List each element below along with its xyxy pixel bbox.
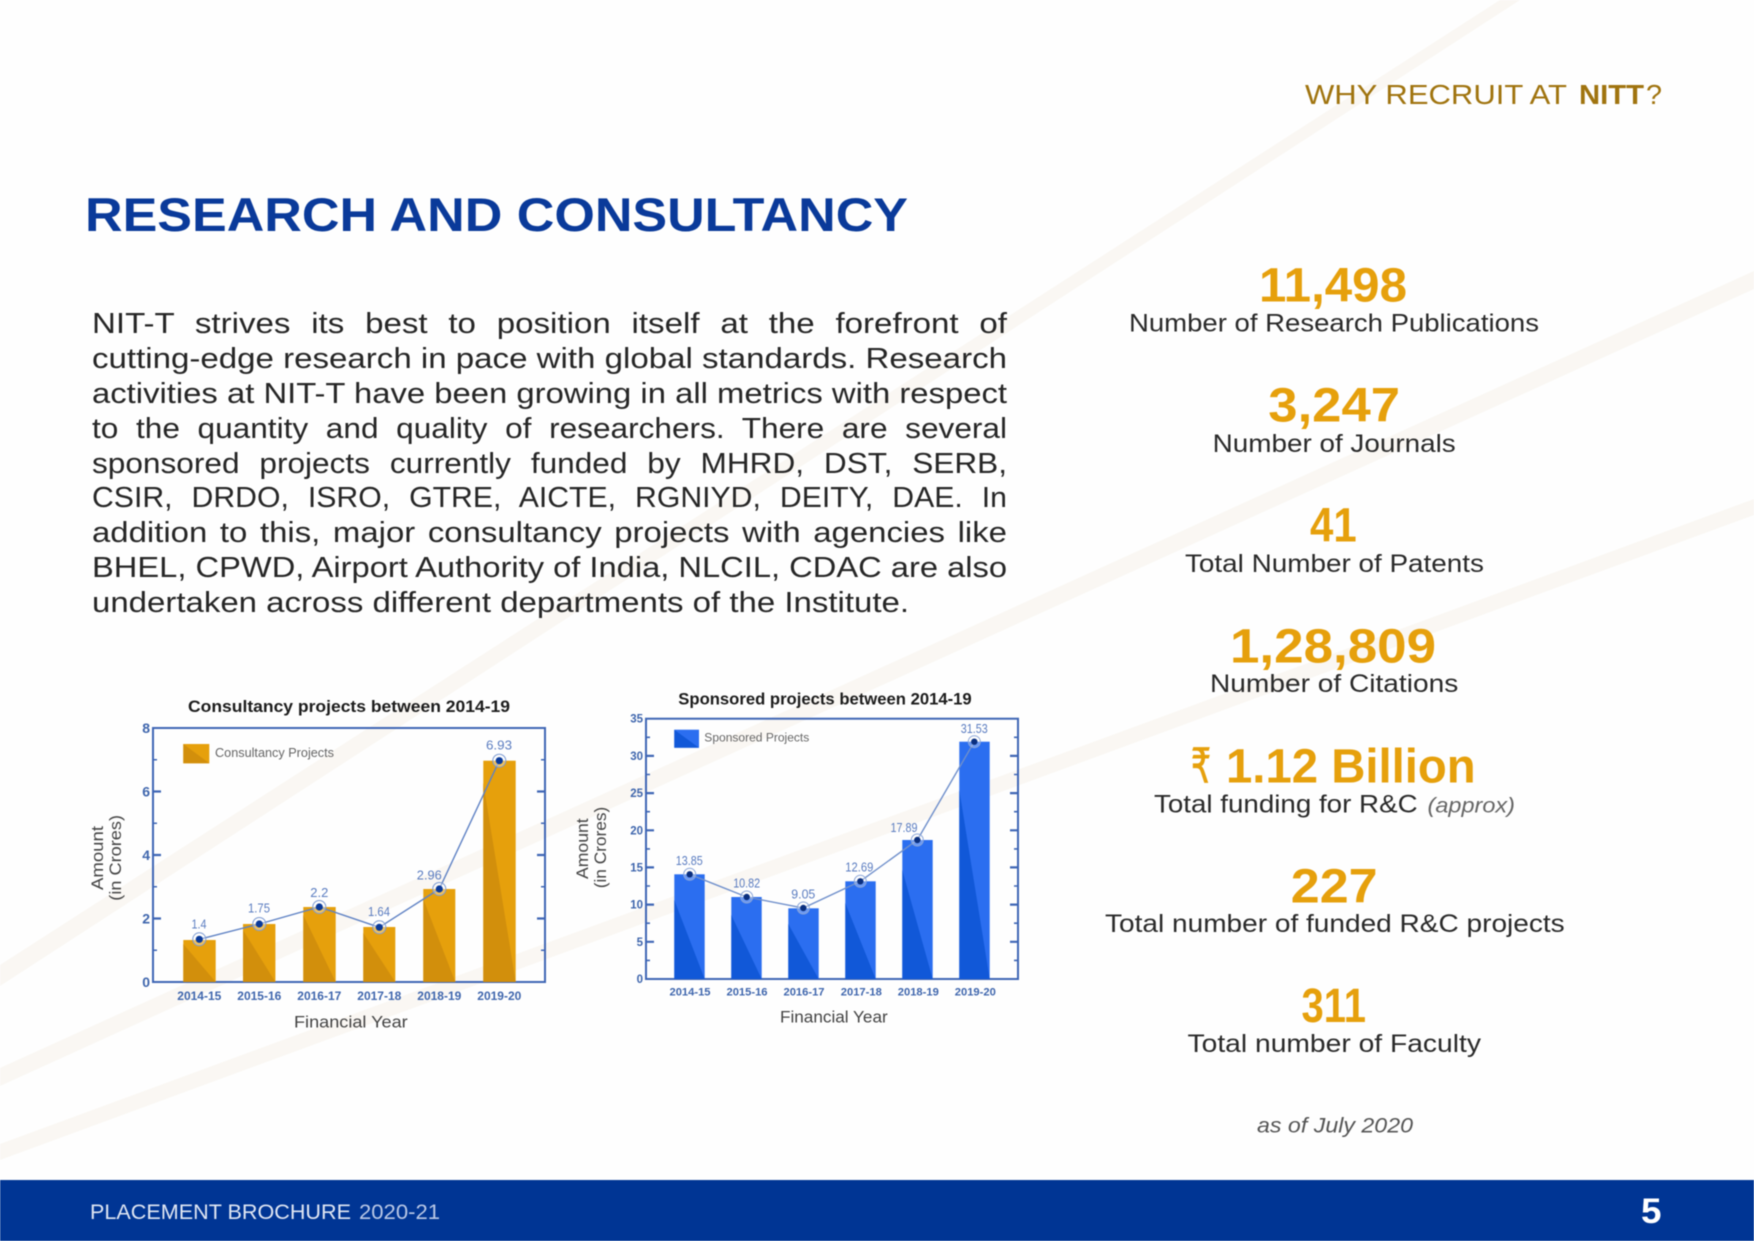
stat: journals <box>1213 380 1456 458</box>
title: RESEARCH AND CONSULTANCY <box>85 188 908 241</box>
header: why recruit <box>1305 79 1662 110</box>
stat: funded projects: 227 <box>1291 860 1378 913</box>
value labels <box>676 721 988 901</box>
stat: funding: Total funding for R&C <box>1154 791 1418 819</box>
value labels: 10.82 <box>733 876 760 891</box>
plot frame and ticks <box>646 719 1018 979</box>
stat: funding: 1.12 Billion <box>1226 740 1476 793</box>
value labels: 2.2 <box>310 885 328 900</box>
chart title: Consultancy projects between 2014-19 <box>188 697 510 716</box>
intro paragraph: sponsored projects currently funded by MHRD, DST, SERB, <box>92 448 1007 480</box>
chart: sponsored projects <box>574 689 1018 1026</box>
header: why recruit: NITT <box>1579 79 1644 110</box>
trend line with markers <box>193 754 506 946</box>
x axis labels: 2016-17 <box>783 987 825 999</box>
x axis labels: 2014-15 <box>177 989 222 1003</box>
intro paragraph: activities at NIT-T have been growing in all metrics with respect <box>92 378 1007 410</box>
stat: citations: 1,28,809 <box>1230 620 1436 673</box>
value labels: 1.4 <box>192 916 206 931</box>
stat: patents <box>1185 500 1484 578</box>
y axis tick labels: 8 <box>142 720 150 736</box>
footer text: PLACEMENT BROCHURE <box>90 1200 351 1224</box>
y axis title: (in Crores) <box>107 815 125 901</box>
value labels: 13.85 <box>676 853 703 868</box>
y axis tick labels: 35 <box>630 714 644 726</box>
value labels: 1.64 <box>368 904 390 919</box>
value labels: 12.69 <box>845 859 873 874</box>
y axis tick labels: 0 <box>142 974 150 990</box>
y axis tick labels: 10 <box>630 900 643 912</box>
y axis title: Amount <box>574 818 592 879</box>
stat: funding: (approx) <box>1428 795 1515 818</box>
y axis tick labels: 6 <box>142 784 150 800</box>
intro paragraph: addition to this, major consultancy projects with agencies like <box>92 517 1007 549</box>
footer text: 2020-21 <box>359 1200 440 1224</box>
legend <box>674 730 810 748</box>
y axis title <box>89 815 125 901</box>
bars <box>674 742 990 979</box>
stat: faculty: 311 <box>1302 980 1366 1033</box>
footer bar <box>0 1180 1754 1241</box>
x axis labels <box>669 987 996 999</box>
x axis labels: 2018-19 <box>898 987 939 999</box>
stat: funded projects <box>1105 860 1565 938</box>
chart: consultancy projects <box>89 697 545 1032</box>
x axis labels: 2015-16 <box>237 989 282 1003</box>
y axis tick labels <box>142 720 150 990</box>
stat: faculty: Total number of Faculty <box>1188 1030 1482 1058</box>
page number: 5 <box>1641 1192 1662 1231</box>
y axis title <box>574 807 610 888</box>
value labels: 9.05 <box>791 886 815 901</box>
bars <box>183 761 516 982</box>
intro paragraph: BHEL, CPWD, Airport Authority of India, NLCIL, CDAC are also <box>92 552 1007 584</box>
value labels: 31.53 <box>961 721 988 736</box>
y axis tick labels: 15 <box>630 862 644 874</box>
stat: funding <box>1154 740 1515 819</box>
stat: citations: Number of Citations <box>1210 670 1458 698</box>
stat: citations <box>1210 620 1458 698</box>
value labels: 1.75 <box>248 901 270 916</box>
stat: funding: ₹ <box>1191 740 1211 793</box>
chart title: Sponsored projects between 2014-19 <box>678 689 972 708</box>
stat: patents: 41 <box>1310 500 1357 553</box>
plot frame and ticks <box>153 728 545 982</box>
stat: funded projects: Total number of funded R&C projects <box>1105 910 1565 938</box>
stat: patents: Total Number of Patents <box>1185 550 1484 578</box>
x axis labels: 2017-18 <box>357 989 402 1003</box>
stat: research publications <box>1129 260 1539 338</box>
stat: research publications: Number of Research Publications <box>1129 310 1539 338</box>
intro paragraph: undertaken across different departments of the Institute. <box>92 587 909 619</box>
stats column <box>1105 260 1565 1138</box>
y axis tick labels: 2 <box>142 910 150 926</box>
y axis title: (in Crores) <box>592 807 610 888</box>
legend <box>183 744 334 763</box>
x axis title: Financial Year <box>780 1008 888 1026</box>
x axis labels: 2019-20 <box>955 987 996 999</box>
stat: journals: Number of Journals <box>1213 430 1456 458</box>
stat: research publications: 11,498 <box>1259 260 1407 313</box>
value labels: 2.96 <box>417 867 442 882</box>
y axis tick labels: 4 <box>142 847 150 863</box>
value labels <box>192 737 512 931</box>
intro paragraph: NIT-T strives its best to position itself at the forefront of <box>92 308 1007 340</box>
value labels: 6.93 <box>486 737 512 752</box>
x axis labels: 2014-15 <box>669 987 711 999</box>
y axis tick labels: 5 <box>637 937 644 949</box>
y axis tick labels: 20 <box>630 825 643 837</box>
y axis tick labels: 30 <box>630 751 643 763</box>
x axis labels <box>177 989 522 1003</box>
header: why recruit: WHY RECRUIT AT <box>1305 79 1567 110</box>
x axis labels: 2016-17 <box>297 989 342 1003</box>
value labels: 17.89 <box>890 820 918 835</box>
stat: journals: 3,247 <box>1268 380 1400 433</box>
x axis labels: 2019-20 <box>477 989 522 1003</box>
intro paragraph: cutting-edge research in pace with global standards. Research <box>92 343 1007 375</box>
y axis title: Amount <box>89 826 107 890</box>
trend line with markers <box>684 736 980 914</box>
intro paragraph: CSIR, DRDO, ISRO, GTRE, AICTE, RGNIYD, DEITY, DAE. In <box>92 482 1007 514</box>
stat: faculty <box>1188 980 1482 1058</box>
header: why recruit: ? <box>1646 79 1662 110</box>
legend: Sponsored Projects <box>704 733 810 745</box>
legend: Consultancy Projects <box>215 746 334 760</box>
date note: as of July 2020 <box>1257 1115 1413 1138</box>
intro paragraph <box>92 308 1007 619</box>
x axis title: Financial Year <box>294 1014 408 1032</box>
y axis tick labels: 25 <box>630 788 644 800</box>
intro paragraph: to the quantity and quality of researchers. There are several <box>92 413 1007 445</box>
x axis labels: 2015-16 <box>726 987 768 999</box>
y axis tick labels: 0 <box>637 974 643 986</box>
y axis tick labels <box>630 714 644 986</box>
x axis labels: 2018-19 <box>417 989 462 1003</box>
x axis labels: 2017-18 <box>841 987 882 999</box>
